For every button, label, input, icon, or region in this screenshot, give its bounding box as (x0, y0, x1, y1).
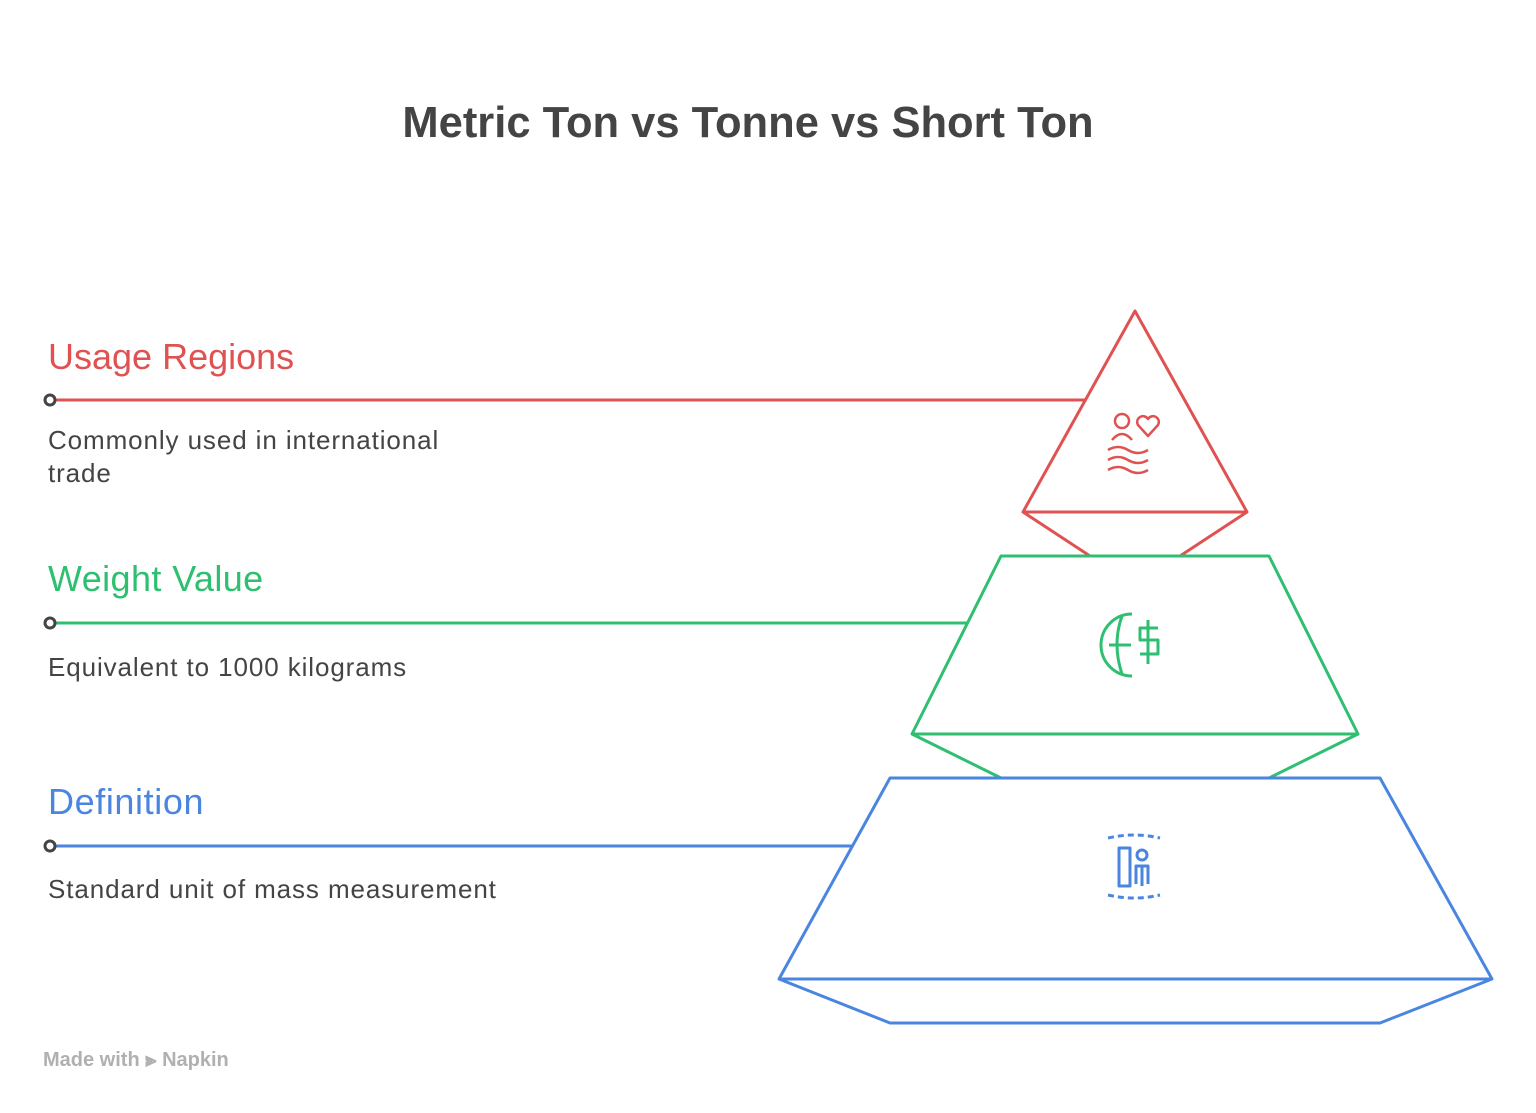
text: usage (48, 425, 439, 488)
icon: globe currency (1101, 614, 1158, 676)
text: definition: Standard unit of mass measurement (48, 874, 497, 904)
title: Metric Ton vs Tonne vs Short Ton (402, 99, 1094, 147)
footer: Made with ⫸ Napkin (43, 1049, 229, 1071)
icon: people heart (1108, 414, 1159, 473)
text: usage: trade (48, 458, 112, 488)
text: weight: Equivalent to 1000 kilograms (48, 652, 407, 682)
heading: usage regions: Usage Regions (48, 336, 294, 377)
text: usage: Commonly used in international (48, 425, 439, 455)
heading: weight value: Weight Value (48, 558, 264, 599)
red tier (45, 311, 1247, 556)
green tier (45, 556, 1358, 778)
icon: measure (1108, 835, 1160, 898)
heading: definition: Definition (48, 781, 204, 822)
blue tier (45, 778, 1492, 1023)
